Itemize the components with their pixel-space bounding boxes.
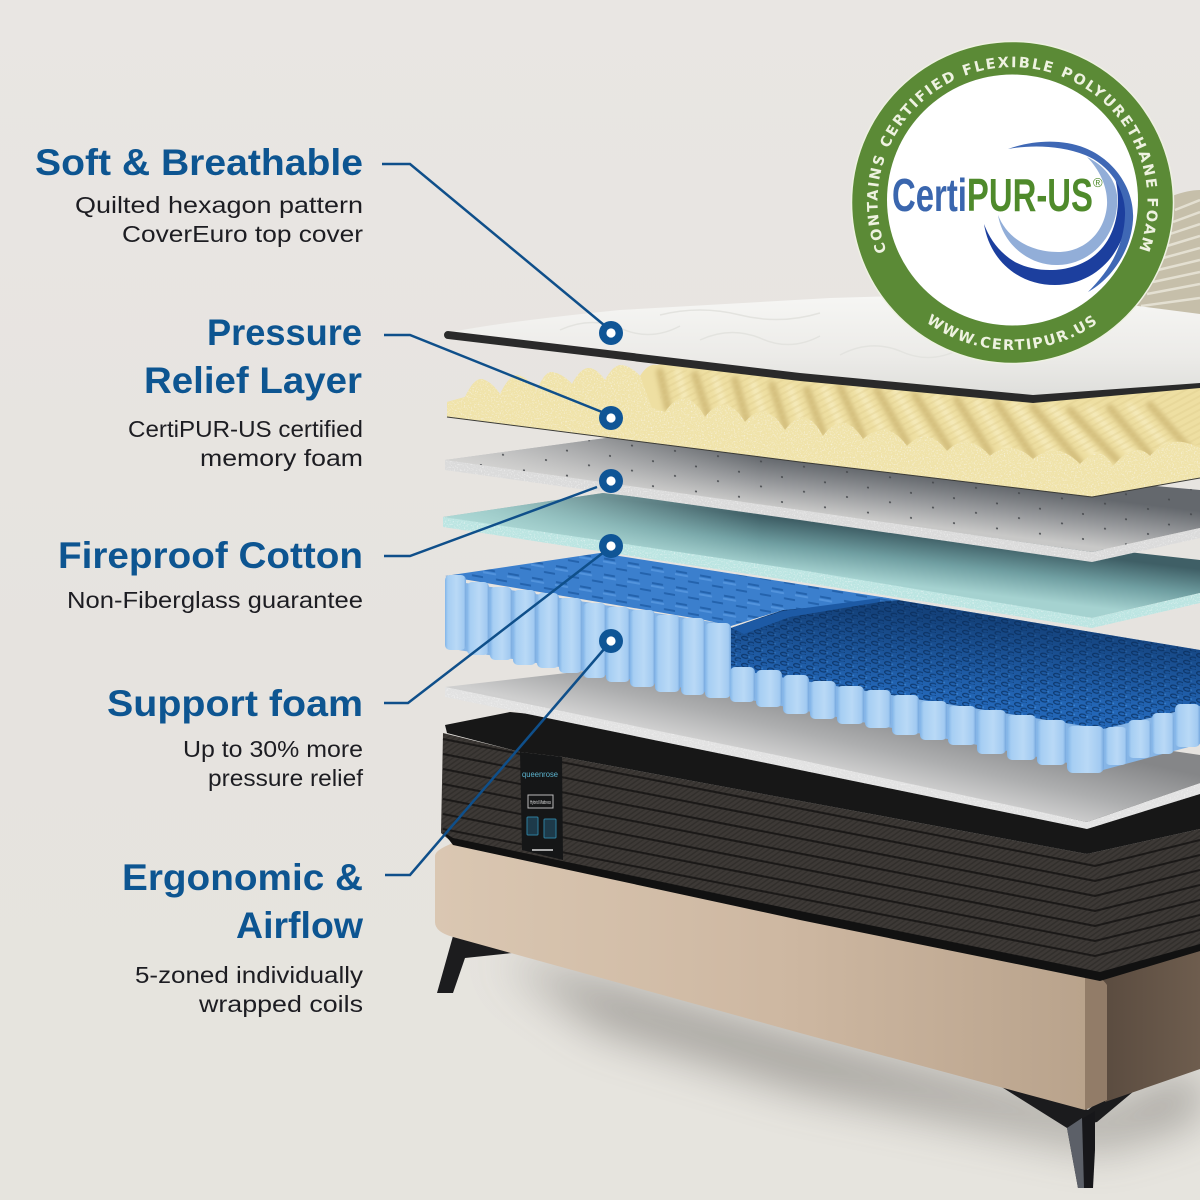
callout: support foam bbox=[107, 683, 363, 791]
leader lines bbox=[382, 164, 605, 875]
callout: ergonomic and airflow: Ergonomic & bbox=[122, 857, 363, 898]
brand tag: queenrose bbox=[522, 770, 559, 779]
badge swirl: dark bbox=[984, 172, 1127, 285]
callout: ergonomic and airflow: wrapped coils bbox=[198, 991, 363, 1017]
badge registered mark: ® bbox=[1093, 175, 1103, 190]
black bottom band bbox=[443, 832, 1200, 981]
callout: support foam: Support foam bbox=[107, 683, 363, 724]
coil top surface, upper bbox=[445, 553, 900, 626]
callout: ergonomic and airflow: Airflow bbox=[236, 905, 363, 946]
foam ridges bbox=[660, 372, 1190, 463]
badge swirl: light bbox=[998, 157, 1117, 265]
coil top surface, lower cut bbox=[730, 597, 1200, 729]
callout: pressure relief layer: CertiPUR-US certified bbox=[128, 416, 363, 442]
quilted pattern bbox=[560, 310, 960, 358]
brand tag bbox=[520, 752, 563, 860]
upholstered side bbox=[1100, 949, 1200, 1102]
floor shadow bbox=[500, 955, 1200, 1145]
callout: pressure relief layer: Pressure bbox=[207, 312, 362, 353]
lower coil row bbox=[730, 667, 1200, 773]
cover piping edge bbox=[444, 331, 1200, 403]
callout: fireproof cotton: Fireproof Cotton bbox=[58, 535, 363, 576]
right leg bbox=[1000, 1086, 1134, 1188]
callout: soft and breathable: Soft & Breathable bbox=[35, 142, 363, 183]
foam shadow line bbox=[447, 417, 1200, 497]
callout: support foam: pressure relief bbox=[208, 765, 363, 791]
callout: pressure relief layer bbox=[128, 312, 363, 471]
brand tag: Hybrid Mattress bbox=[530, 800, 551, 806]
badge wordmark: CertiPUR-US bbox=[892, 169, 1093, 221]
badge ring text top: CONTAINS CERTIFIED FLEXIBLE POLYURETHANE FOAM bbox=[866, 56, 1158, 253]
callout: pressure relief layer: Relief Layer bbox=[144, 360, 362, 401]
dark quilted mattress bbox=[441, 712, 1200, 981]
callout: soft and breathable: CoverEuro top cover bbox=[122, 221, 363, 247]
callout: ergonomic and airflow: 5-zoned individually bbox=[135, 962, 363, 988]
layer: pocket coils bbox=[445, 553, 1200, 773]
left leg bbox=[437, 936, 512, 993]
foam front face bbox=[447, 365, 1200, 497]
layer: teal gel foam bbox=[443, 493, 1200, 628]
CertiPUR-US badge bbox=[851, 41, 1174, 364]
pillow bbox=[1130, 190, 1200, 320]
marker: fireproof cotton bbox=[599, 469, 623, 493]
callout: pressure relief layer: memory foam bbox=[200, 445, 363, 471]
callout: soft and breathable: Quilted hexagon pattern bbox=[75, 192, 363, 218]
marker: support foam bbox=[599, 534, 623, 558]
quilting stitches bbox=[443, 739, 1200, 956]
marker: cover bbox=[599, 321, 623, 345]
upholstered front bbox=[435, 843, 1085, 1110]
callout: ergonomic and airflow bbox=[122, 857, 363, 1017]
layer: lower foam sheet bbox=[445, 668, 1200, 829]
callout: fireproof cotton: Non-Fiberglass guarantee bbox=[67, 587, 363, 613]
black top band bbox=[445, 712, 1200, 854]
layer: yellow egg-crate memory foam bbox=[447, 360, 1200, 497]
callout: soft and breathable bbox=[35, 142, 363, 247]
badge swirl: outer bbox=[1008, 142, 1133, 292]
callout: fireproof cotton bbox=[58, 535, 363, 613]
coil backing bbox=[447, 580, 1200, 770]
layer: top quilted cover bbox=[444, 296, 1200, 403]
callout: support foam: Up to 30% more bbox=[183, 736, 363, 762]
bed base bbox=[435, 843, 1200, 1188]
foam ripple texture bbox=[660, 370, 1200, 452]
layer: grey perforated fireproof cotton bbox=[445, 437, 1200, 562]
upholstered corner bbox=[1085, 976, 1107, 1110]
marker: memory foam bbox=[599, 406, 623, 430]
upper coil row bbox=[445, 575, 731, 698]
badge ring text bottom: WWW.CERTIPUR.US bbox=[928, 314, 1096, 350]
marker: coils bbox=[599, 629, 623, 653]
